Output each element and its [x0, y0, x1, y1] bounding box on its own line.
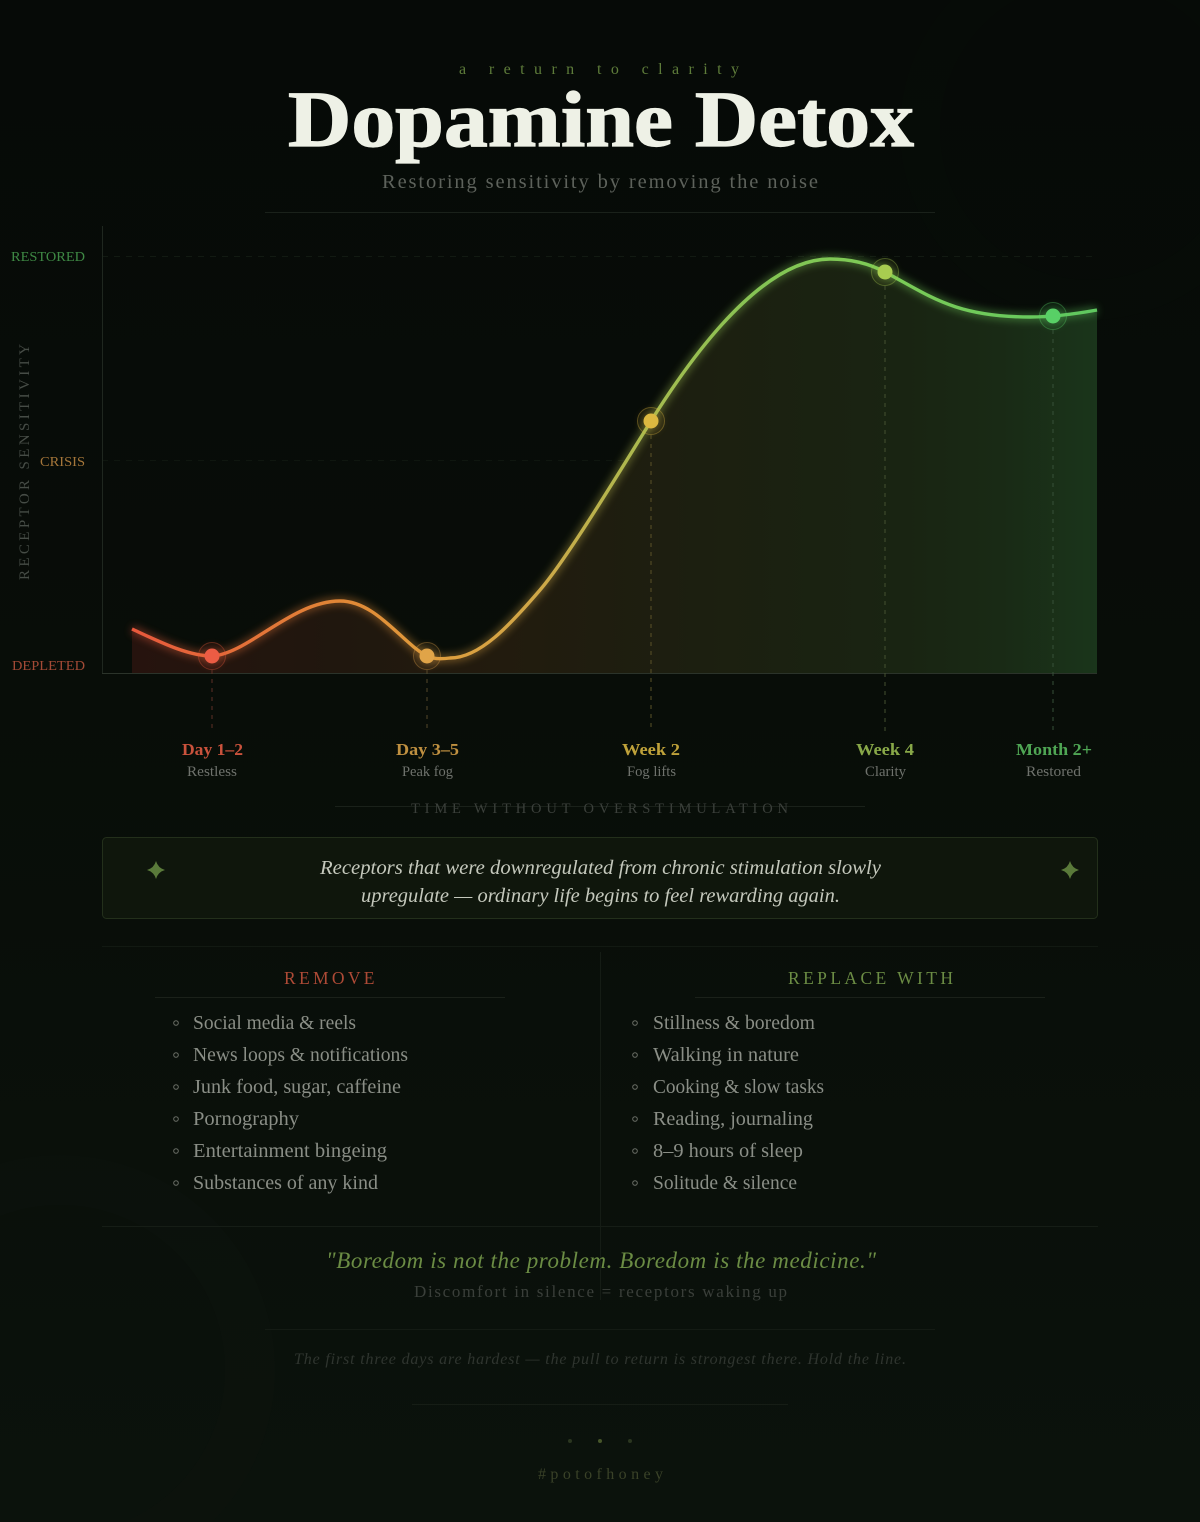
callout text: Receptors that were downregulated from chronic stimulation slowly [319, 857, 881, 879]
quote: "Boredom is not the problem. Boredom is the medicine." [326, 1248, 876, 1273]
list: things to remove: Substances of any kind [193, 1173, 378, 1194]
list: things to remove: News loops & notifications [193, 1045, 408, 1066]
area under curve [132, 259, 1097, 673]
milestone: Month 2+ [1016, 302, 1092, 780]
list: things to remove: Junk food, sugar, caffeine [193, 1077, 401, 1098]
footer [538, 1439, 663, 1483]
glow of curve [132, 259, 1097, 659]
y axis title: RECEPTOR SENSITIVITY [17, 344, 33, 580]
y axis labels [11, 250, 85, 674]
eyebrow: a return to clarity [459, 61, 739, 78]
callout text [319, 857, 881, 907]
list: replacements [633, 1013, 824, 1194]
curve [132, 259, 1097, 659]
quote [326, 1248, 876, 1301]
milestone: Week 2 [622, 408, 680, 780]
list: replacements: Walking in nature [653, 1045, 799, 1066]
dots [568, 1439, 632, 1443]
note: The first three days are hardest — the pull to return is strongest there. Hold the line. [294, 1351, 906, 1368]
milestone: Week 4: Clarity [865, 764, 907, 780]
list: things to remove: Pornography [193, 1109, 299, 1130]
callout: receptors upregulate [102, 838, 1098, 918]
heading: replace with: REPLACE WITH [788, 968, 953, 988]
title: Dopamine Detox [288, 77, 915, 164]
milestone: Day 1-2: Restless [187, 764, 237, 780]
quote caption: Discomfort in silence = receptors waking up [414, 1282, 787, 1301]
panel: replace with [633, 968, 1045, 1194]
x axis title: TIME WITHOUT OVERSTIMULATION [411, 801, 789, 817]
milestone: Week 4: Week 4 [856, 740, 914, 759]
icon: sparkle left [147, 861, 165, 879]
panel: remove [155, 968, 505, 1194]
hashtag: #potofhoney [538, 1466, 663, 1483]
subtitle: Restoring sensitivity by removing the noise [382, 171, 818, 193]
list: replacements: Solitude & silence [653, 1173, 797, 1194]
callout text: upregulate — ordinary life begins to feel rewarding again. [361, 885, 840, 907]
list: replacements: Reading, journaling [653, 1109, 813, 1130]
y axis labels: CRISIS [40, 455, 85, 470]
list: things to remove: Social media & reels [193, 1013, 356, 1034]
list: replacements: Stillness & boredom [653, 1013, 815, 1034]
milestone: Week 2: Week 2 [622, 740, 680, 759]
milestone: Day 1-2: Day 1–2 [182, 740, 243, 759]
list: replacements: Cooking & slow tasks [653, 1077, 824, 1098]
chart: receptor sensitivity curve [11, 226, 1097, 817]
list: replacements: 8–9 hours of sleep [653, 1141, 803, 1162]
list: things to remove: Entertainment bingeing [193, 1141, 387, 1162]
milestone: Day 1-2 [182, 642, 243, 780]
milestone: Day 3-5: Peak fog [402, 764, 453, 780]
header [288, 61, 915, 193]
y axis labels: DEPLETED [12, 659, 85, 674]
milestone: Month 2+: Month 2+ [1016, 740, 1092, 759]
y axis labels: RESTORED [11, 250, 85, 265]
milestone: Day 3-5 [396, 642, 459, 780]
milestone: Month 2+: Restored [1026, 764, 1082, 780]
icon: sparkle right [1061, 861, 1079, 879]
list: things to remove [174, 1013, 408, 1194]
milestone: Day 3-5: Day 3–5 [396, 740, 459, 759]
milestone: Week 2: Fog lifts [627, 764, 676, 780]
heading: remove: REMOVE [284, 968, 374, 988]
milestone: Week 4 [856, 258, 914, 780]
